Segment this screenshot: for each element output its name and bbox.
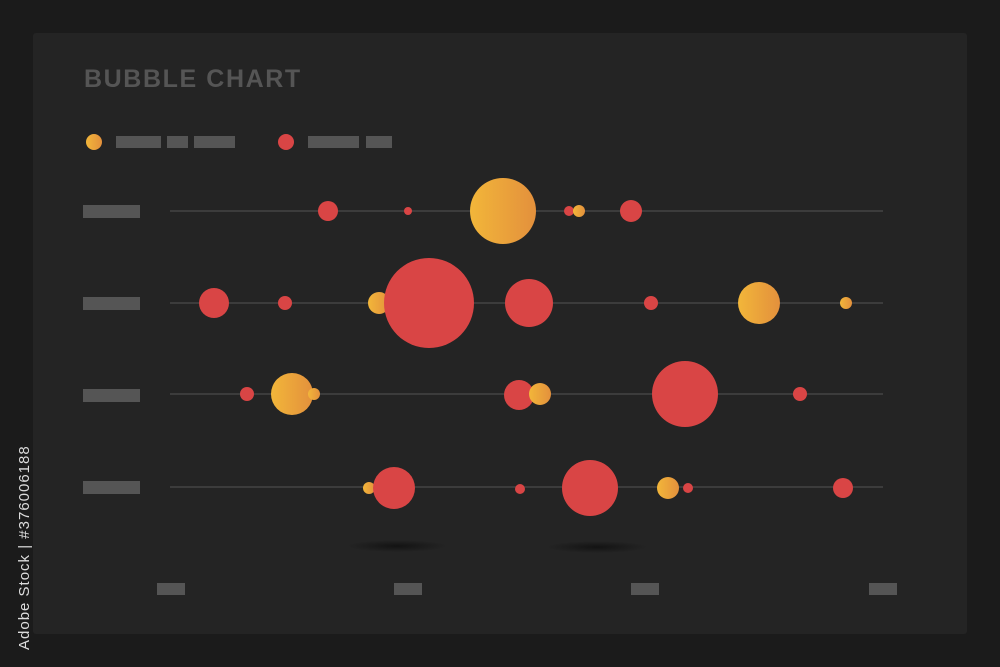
bubbles row 4 bbox=[363, 460, 853, 516]
bubbles row 1 bbox=[318, 178, 642, 244]
title: BUBBLE CHART bbox=[84, 65, 302, 93]
grid lines bbox=[170, 211, 883, 487]
legend bbox=[86, 134, 392, 150]
shadows bbox=[347, 540, 647, 553]
bubbles row 3 bbox=[240, 361, 807, 427]
watermark id: Adobe Stock | #376006188 bbox=[16, 445, 33, 650]
row labels bbox=[83, 205, 140, 494]
x axis labels bbox=[157, 583, 897, 595]
bubbles row 2 bbox=[199, 258, 852, 348]
